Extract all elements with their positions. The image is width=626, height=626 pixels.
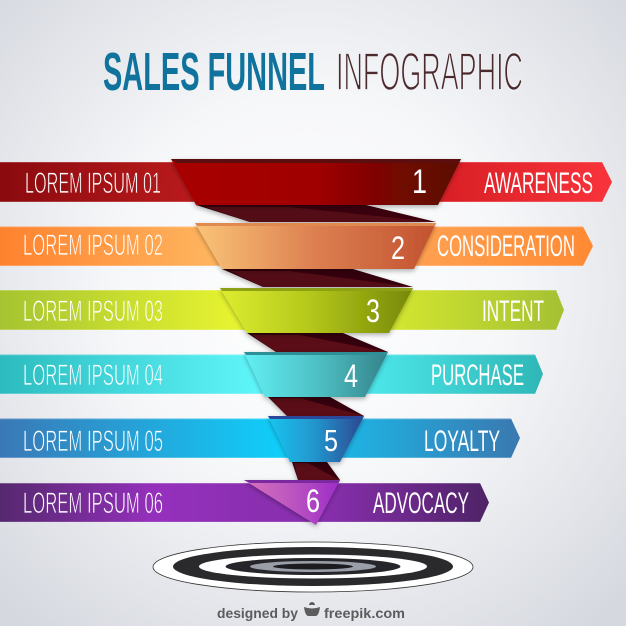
band 1: awareness: [0, 162, 612, 202]
band 5: loyalty: [0, 418, 520, 458]
label: lorem ipsum 06: LOREM IPSUM 06: [23, 487, 163, 520]
credit line: freepik.com: [324, 605, 405, 621]
band 4: purchase: [0, 354, 543, 394]
credit line: [217, 602, 405, 621]
label: advocacy: ADVOCACY: [373, 487, 469, 520]
funnel segment 1: [171, 159, 461, 205]
icon: freepik crown: [304, 602, 320, 616]
funnel segment 4: [244, 352, 388, 397]
number 5: 5: [324, 423, 338, 458]
title: SALES FUNNEL: [103, 42, 325, 102]
number 6: 6: [306, 483, 320, 519]
dark connectors between funnel segments: [196, 205, 436, 480]
label: loyalty: LOYALTY: [424, 425, 500, 458]
number 1: 1: [412, 163, 427, 201]
label: purchase: PURCHASE: [431, 359, 524, 392]
band 6: advocacy: [0, 483, 489, 522]
band 3: intent: [0, 290, 564, 330]
funnel segment 2: [195, 223, 436, 269]
band 2: consideration: [0, 226, 593, 266]
label: lorem ipsum 05: LOREM IPSUM 05: [23, 425, 163, 458]
number 4: 4: [344, 358, 358, 394]
funnel segment 5: [268, 416, 364, 462]
label: lorem ipsum 02: LOREM IPSUM 02: [23, 229, 163, 262]
label: lorem ipsum 03: LOREM IPSUM 03: [23, 295, 163, 328]
target rings: [153, 542, 473, 592]
label: lorem ipsum 01: LOREM IPSUM 01: [25, 167, 161, 200]
funnel segment 6: [244, 480, 340, 525]
label: intent: INTENT: [482, 295, 544, 328]
number 3: 3: [366, 293, 380, 329]
label: lorem ipsum 04: LOREM IPSUM 04: [23, 359, 163, 392]
credit line: designed by: [217, 605, 298, 621]
number 2: 2: [391, 230, 405, 266]
funnel segment 3: [220, 288, 413, 333]
